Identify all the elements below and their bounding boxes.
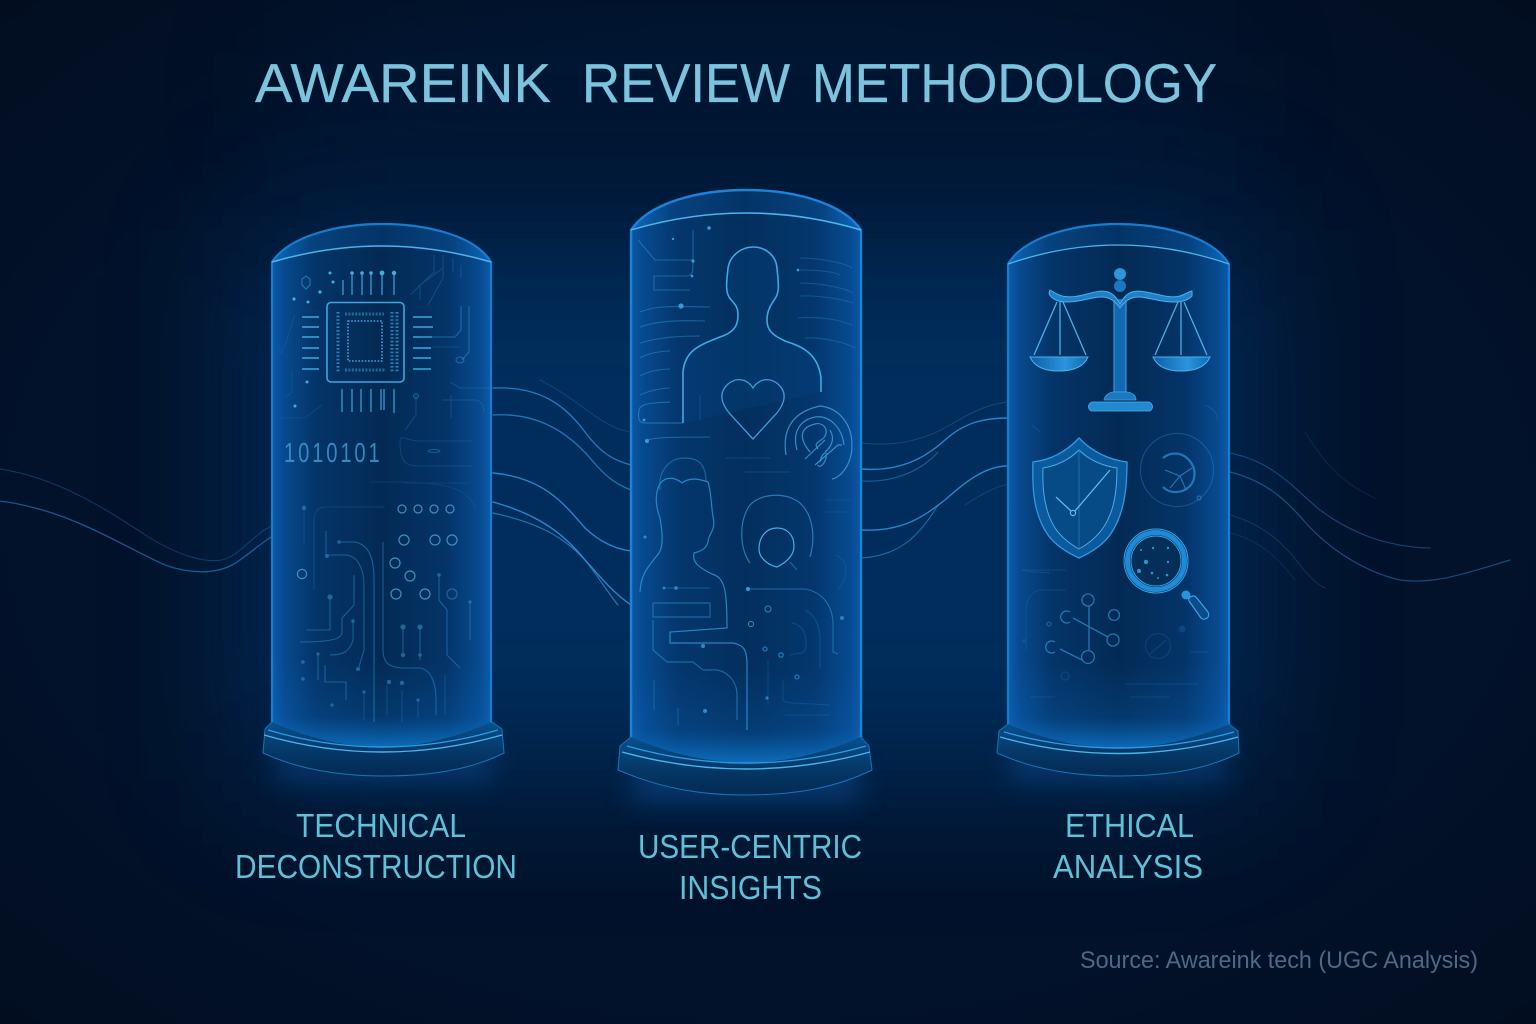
body bottom glow [272, 660, 491, 747]
dome rim and base arcs [264, 246, 502, 752]
pillar glow [632, 765, 860, 802]
pillar base plate [618, 737, 872, 795]
pillar label: user-centric insights: INSIGHTS [679, 869, 822, 906]
pillar: technical deconstruction [263, 224, 504, 782]
wave: between second and third pillars [861, 402, 1008, 558]
icon: magnifying glass [1124, 529, 1209, 619]
icon: microchip [292, 271, 433, 413]
pillar label: user-centric insights: USER-CENTRIC [638, 828, 862, 865]
dome cap [631, 190, 861, 230]
title: METHODOLOGY [812, 53, 1217, 114]
icon: compass globe circle [1032, 405, 1217, 506]
circuit traces: upper [280, 255, 491, 510]
icon: heart [722, 380, 784, 439]
pillar glow [275, 745, 492, 782]
source note: Source: Awareink tech (UGC Analysis) [1080, 947, 1478, 974]
pillar base plate [263, 722, 504, 776]
body brightening [631, 213, 861, 762]
dome cap [1008, 224, 1229, 264]
icon: fingerprint circle [785, 406, 852, 479]
pillar base plate [997, 724, 1239, 776]
pillar label: ethical analysis: ANALYSIS [1053, 848, 1203, 885]
body bottom glow [631, 670, 861, 762]
pillar glass body [1008, 224, 1229, 748]
title: AWAREINK [255, 53, 551, 114]
flowing light waves [0, 380, 1510, 605]
icon: scales of justice [1030, 268, 1210, 411]
dome cap [272, 224, 491, 262]
pillar: user-centric insights [618, 190, 872, 802]
icon: circular profile [742, 495, 813, 570]
pillar outline [1008, 224, 1229, 724]
dome rim and base arcs [622, 213, 870, 769]
icon: upper person silhouette [683, 247, 821, 423]
body bottom glow [1008, 660, 1229, 748]
dome rim and base arcs [1000, 245, 1238, 754]
binary digits: 1010101 [284, 438, 383, 469]
pillar label: ethical analysis: ETHICAL [1065, 807, 1194, 844]
wave: right of third pillar [1230, 432, 1510, 588]
pillar: ethical analysis [997, 224, 1239, 782]
icon: lower person silhouette [640, 458, 747, 730]
circuit nodes [297, 505, 457, 599]
pillar glow [1010, 746, 1228, 782]
pillar label: technical deconstruction: TECHNICAL [296, 807, 466, 844]
title: REVIEW [582, 53, 791, 114]
pillar outline [272, 224, 491, 722]
circuit traces: lower [300, 505, 472, 722]
pillar label: technical deconstruction: DECONSTRUCTION [235, 848, 517, 885]
pillar label: user-centric insights [638, 828, 862, 906]
pillar label: technical deconstruction [235, 807, 517, 885]
circuit traces: lower right [746, 500, 850, 715]
faint detail traces [1022, 570, 1208, 697]
wave: left of first pillar [0, 469, 274, 572]
pillar label: ethical analysis [1053, 807, 1203, 885]
icon: node network [1046, 594, 1119, 680]
icon: shield with check [1033, 438, 1127, 558]
pillar outline [631, 190, 861, 737]
pillar glass body [631, 190, 861, 762]
circuit traces: upper panels [638, 226, 855, 472]
pillar glass body [272, 224, 491, 747]
wave: between first and second pillars [493, 380, 631, 605]
